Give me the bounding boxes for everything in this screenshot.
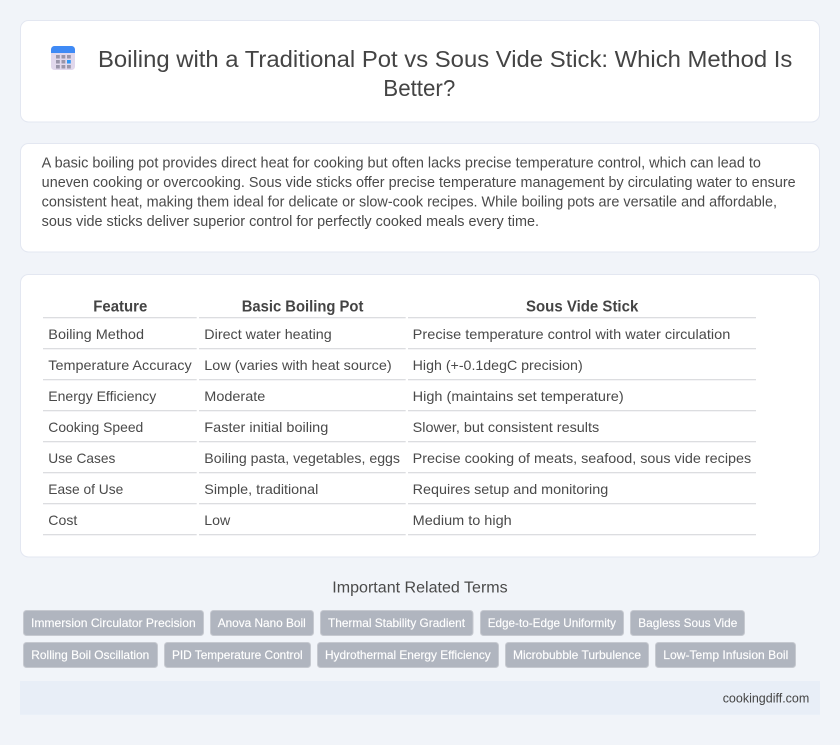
row: cooking speed: Cooking Speed [48,419,143,435]
row: cost: Medium to high [413,512,512,528]
footer bar [20,681,820,715]
related term tags: Bagless Sous Vide [638,616,738,630]
row: cost: Low [204,512,231,528]
row: energy efficiency [48,388,624,404]
row: ease of use: Requires setup and monitoring [413,481,608,497]
row: use cases [48,450,751,466]
title [98,46,792,101]
table header: Feature [93,298,148,316]
panel: introduction text [20,144,820,252]
row: temperature accuracy: Temperature Accuracy [48,357,192,373]
panel: introduction text: uneven cooking or overcooking. Sous vide sticks offer precise temperature management by circulating water to ensure [42,175,796,191]
row: boiling method: Precise temperature control with water circulation [413,326,730,342]
panel: comparison table [20,274,820,557]
row: boiling method: Direct water heating [204,326,332,342]
panel: introduction text: sous vide sticks deliver superior control for perfectly cooked meals every time. [42,214,539,230]
row: temperature accuracy [48,357,583,373]
related term tags: PID Temperature Control [172,648,303,662]
related term tags: Thermal Stability Gradient [328,616,466,630]
row: energy efficiency: Moderate [204,388,266,404]
related term tags: Microbubble Turbulence [513,648,641,662]
title: Boiling with a Traditional Pot vs Sous Vide Stick: Which Method Is [98,46,792,72]
table header [93,298,639,316]
table header: Sous Vide Stick [526,298,639,316]
row: temperature accuracy: Low (varies with heat source) [204,357,392,373]
footer bar: cookingdiff.com [723,691,809,705]
panel: introduction text: consistent heat, making them ideal for delicate or slow-cook recipes. While boiling pots are versatile and affordable, [42,195,777,211]
row: temperature accuracy: High (+-0.1degC precision) [413,357,583,373]
row: cooking speed: Faster initial boiling [204,419,328,435]
row: boiling method [48,326,730,342]
row: use cases: Precise cooking of meats, seafood, sous vide recipes [413,450,751,466]
panel: introduction text: A basic boiling pot provides direct heat for cooking but often lacks precise temperature control, which can lead to [42,156,761,172]
related term tags: Edge-to-Edge Uniformity [488,616,616,630]
related term tags: Immersion Circulator Precision [31,616,196,630]
row: cooking speed: Slower, but consistent results [413,419,599,435]
related term tags: Rolling Boil Oscillation [31,648,149,662]
row: cost [48,512,512,528]
table header: Basic Boiling Pot [242,298,363,316]
row: use cases: Use Cases [48,450,115,466]
row: energy efficiency: High (maintains set temperature) [413,388,624,404]
related term tags: Low-Temp Infusion Boil [663,648,788,662]
icon: calendar [51,46,75,70]
row: use cases: Boiling pasta, vegetables, eggs [204,450,400,466]
title: Better? [383,75,455,101]
row: ease of use [48,481,608,497]
row: ease of use: Simple, traditional [204,481,318,497]
row: ease of use: Ease of Use [48,481,124,497]
row: cost: Cost [48,512,77,528]
related term tags: Anova Nano Boil [218,616,306,630]
row: energy efficiency: Energy Efficiency [48,388,156,404]
related term tags: Hydrothermal Energy Efficiency [325,648,491,662]
row: boiling method: Boiling Method [48,326,144,342]
panel: title header [20,20,820,122]
related term tags [24,610,796,668]
row: cooking speed [48,419,599,435]
heading: related terms: Important Related Terms [332,580,508,597]
